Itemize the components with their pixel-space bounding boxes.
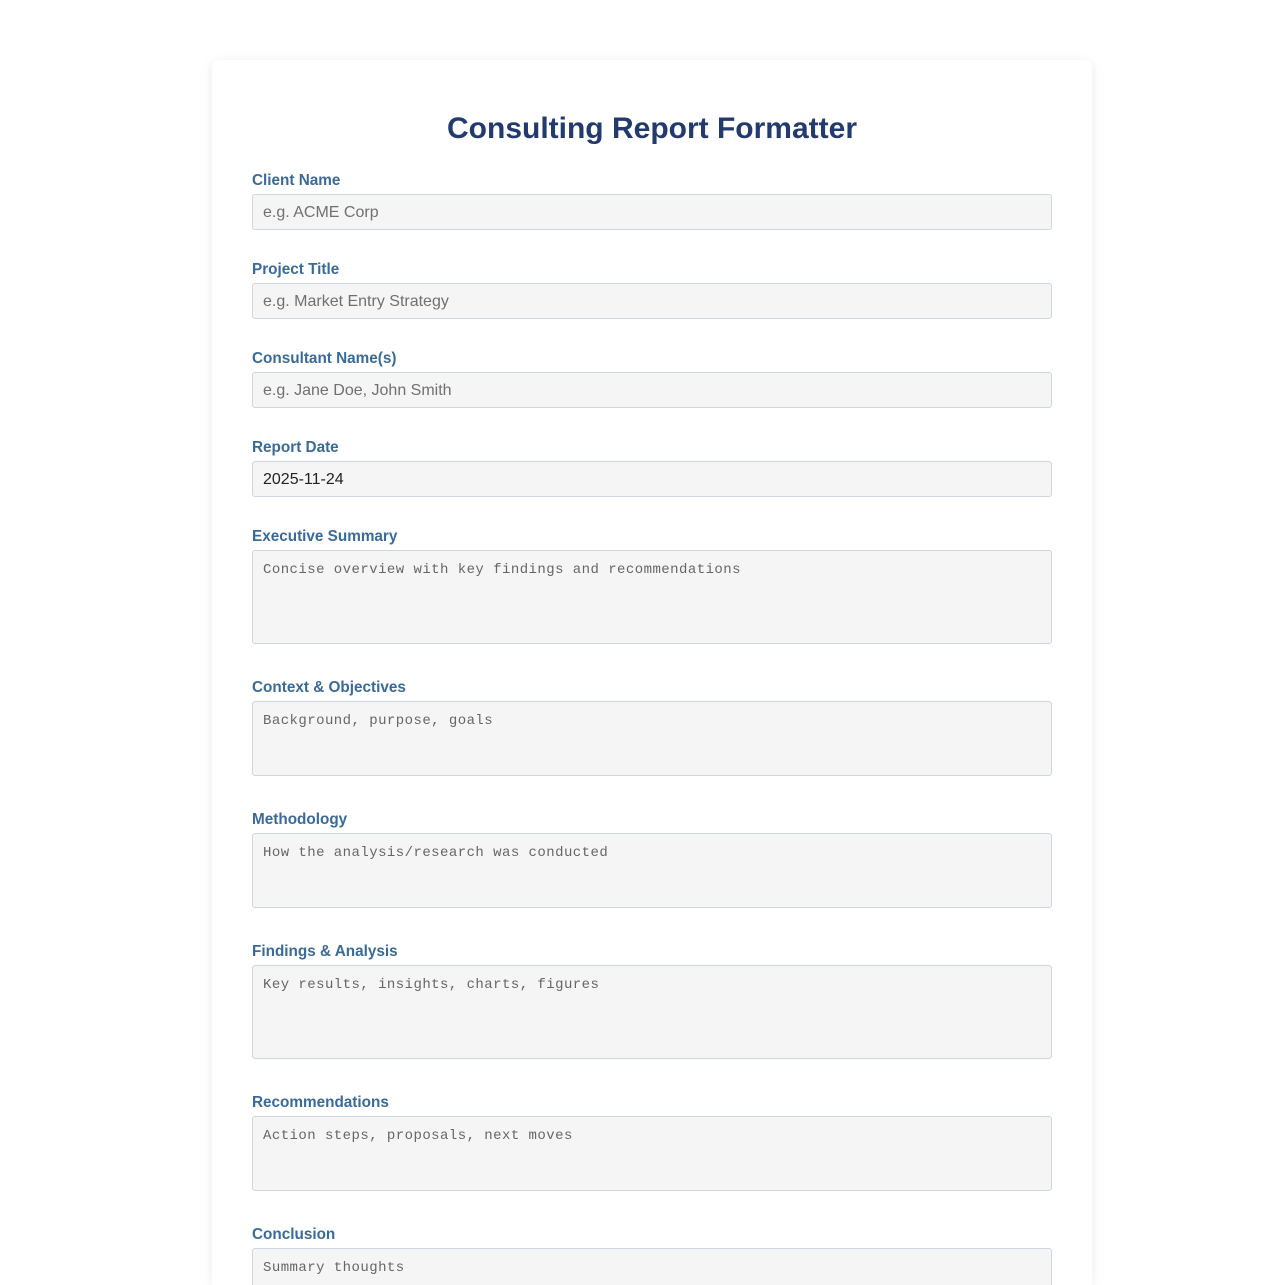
label: context: Context & Objectives	[252, 679, 406, 696]
textarea: findings: Key results, insights, charts, figures	[263, 977, 599, 993]
textarea: recommendations: Action steps, proposals, next moves	[263, 1128, 573, 1144]
label: consultant: Consultant Name(s)	[252, 350, 396, 367]
input: project title: e.g. Market Entry Strategy	[263, 293, 449, 310]
input: report date: 2025-11-24	[263, 471, 344, 488]
title: Consulting Report Formatter	[447, 112, 857, 145]
textarea: findings	[252, 965, 1052, 1059]
input: consultant: e.g. Jane Doe, John Smith	[263, 382, 452, 399]
label: executive summary: Executive Summary	[252, 528, 397, 545]
input: consultant	[252, 372, 1052, 408]
input: project title	[252, 283, 1052, 319]
label: project title: Project Title	[252, 261, 339, 278]
textarea: context: Background, purpose, goals	[263, 713, 493, 729]
card	[212, 60, 1092, 1285]
label: findings: Findings & Analysis	[252, 943, 398, 960]
label: conclusion: Conclusion	[252, 1226, 335, 1243]
textarea: executive summary: Concise overview with key findings and recommendations	[263, 562, 741, 578]
textarea: executive summary	[252, 550, 1052, 644]
textarea: conclusion	[252, 1248, 1052, 1285]
input: client name	[252, 194, 1052, 230]
input: client name: e.g. ACME Corp	[263, 204, 379, 221]
textarea: context	[252, 701, 1052, 776]
textarea: conclusion: Summary thoughts	[263, 1260, 405, 1276]
label: report date: Report Date	[252, 439, 339, 456]
label: recommendations: Recommendations	[252, 1094, 389, 1111]
label: client name: Client Name	[252, 172, 340, 189]
textarea: methodology	[252, 833, 1052, 908]
textarea: recommendations	[252, 1116, 1052, 1191]
textarea: methodology: How the analysis/research was conducted	[263, 845, 608, 861]
label: methodology: Methodology	[252, 811, 347, 828]
input: report date	[252, 461, 1052, 497]
